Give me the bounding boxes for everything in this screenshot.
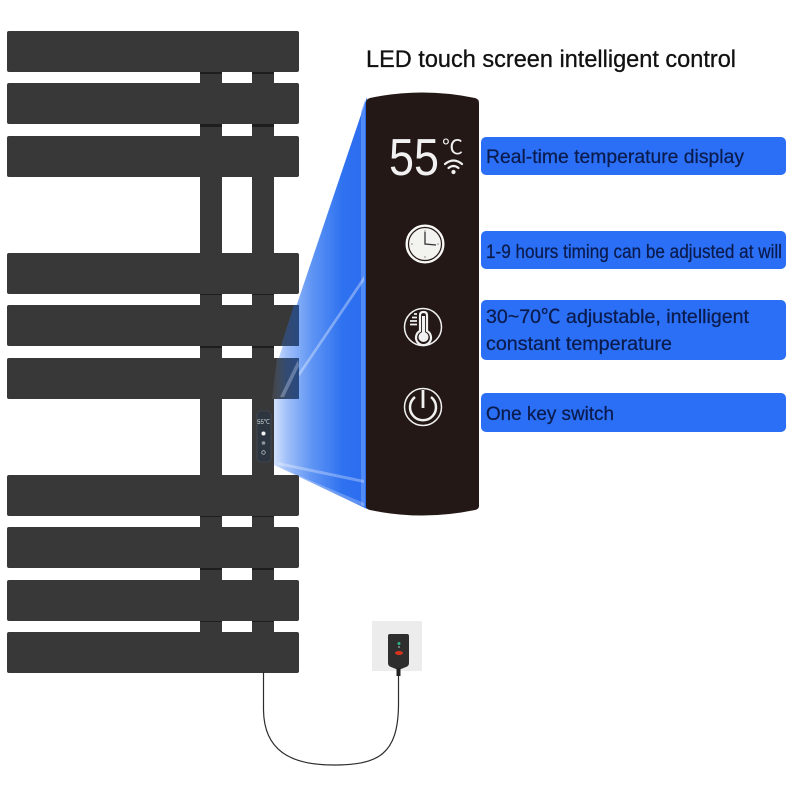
label: adjustable temperature [481, 300, 786, 360]
power cord [264, 672, 398, 765]
label: timing [481, 231, 786, 269]
temperature readout: ℃ [442, 137, 463, 159]
label: one key switch [481, 393, 786, 432]
vertical risers [200, 60, 274, 650]
riser shadows [200, 71, 274, 622]
icon: thermometer [404, 308, 442, 346]
small control panel on rail [257, 411, 271, 462]
label: adjustable temperature: 30~70℃ adjustable, intelligent [486, 306, 750, 328]
icon: wifi [445, 160, 462, 173]
beam tint over bars [272, 305, 299, 399]
horizontal bars [7, 31, 299, 673]
enlarged control panel [366, 92, 479, 516]
blue projection beam [272, 97, 367, 509]
temperature readout: 55 [389, 129, 439, 187]
icon: power [404, 388, 442, 426]
label: real-time temperature: Real-time temperature display [486, 146, 744, 168]
small control panel on rail: 55℃ [257, 419, 270, 426]
wall socket and plug [372, 621, 422, 676]
icon: clock [406, 225, 444, 263]
label: real-time temperature [481, 137, 786, 175]
label: one key switch: One key switch [486, 403, 614, 425]
label: adjustable temperature: constant temperature [486, 333, 672, 355]
towel rail [7, 31, 299, 673]
title: LED touch screen intelligent control [366, 46, 736, 73]
